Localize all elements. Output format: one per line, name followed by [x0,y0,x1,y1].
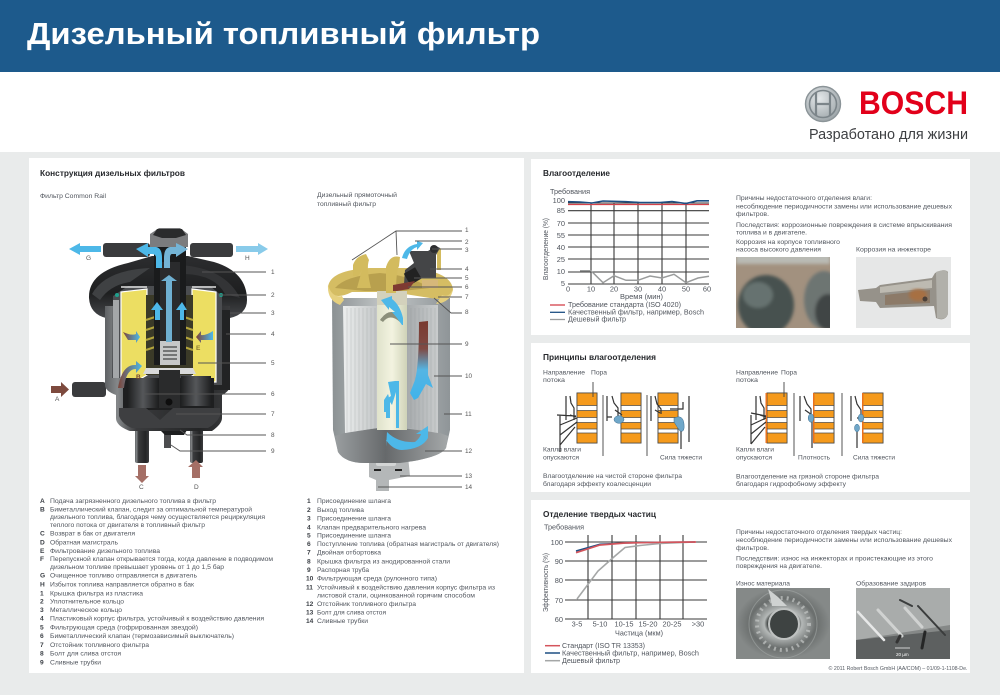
label: flow direction: Направление [543,370,585,376]
line chart: particle separation: >30 [692,620,704,628]
legend: inline filter: 13 [306,609,314,616]
legend: Common Rail filter: 9 [40,660,44,667]
label: flow direction [543,370,585,384]
icon: Bosch armature [806,86,840,122]
part numbers: 12 [465,448,473,455]
lower tubes [135,425,203,463]
legend: inline filter: Распорная труба [317,566,369,574]
labels: droplets and gravity: опускаются [543,454,579,462]
line chart: water separation: 5 [561,279,565,288]
text block: causes and consequences: топлива и в двигателе. [736,230,807,236]
legend: inline filter: 9 [307,567,311,574]
part numbers: 3 [271,310,275,317]
legend: Common Rail filter: дизельного топлива, благодаря чему осуществляется рециркуляция [50,513,265,521]
arrow: D [188,460,203,478]
caption [736,472,879,488]
pleats and core [146,295,193,375]
photo: scoring: 20 µm [896,652,909,657]
legend: inline filter: 5 [307,532,311,539]
line chart: particle separation: 80 [555,576,563,585]
part numbers: 2 [271,292,275,299]
line chart: particle separation: 70 [555,596,563,605]
part numbers: 13 [465,473,473,480]
caption: благодаря гидрофобному эффекту [736,480,847,488]
line chart: water separation: 60 [703,284,711,294]
labels: droplets and gravity: Капли влаги [543,446,581,454]
line chart: particle separation [541,522,707,665]
legend: Common Rail filter: Отстойник топливного фильтра [50,641,149,649]
legend: Common Rail filter: Сливные трубки [50,659,101,667]
filter media: left [121,289,147,382]
spacer tube [377,305,407,430]
photo caption: pump corrosion: насоса высокого давления [736,246,821,254]
arrow: E left [123,331,140,343]
line chart: water separation: Требования [550,187,590,196]
diagram: Common Rail filter [51,228,275,491]
legend: Common Rail filter [40,498,273,667]
legend: Common Rail filter: Болт для слива отстоя [50,651,121,658]
arrow: G [69,243,101,255]
legend: Common Rail filter: 1 [40,590,44,598]
legend: inline filter: 8 [307,558,311,565]
diagram: coalescence [543,370,702,488]
part numbers: 7 [465,294,469,301]
legend: Common Rail filter: D [40,540,45,546]
legend: inline filter: Выход топлива [317,507,364,514]
legend: inline filter: Сливные трубки [317,617,368,625]
legend: inline filter: 4 [307,524,311,531]
diagram: inline filter [328,227,473,491]
labels: droplets: Капли влаги [736,446,774,454]
letter labels [55,255,250,491]
leader lines [352,231,462,487]
labels: droplets and gravity [543,446,581,462]
legend: Common Rail filter: Фильтрование дизельного топлива [50,548,160,555]
label: flow direction [736,370,778,384]
legend: inline filter [306,498,499,625]
white logo band [0,72,1000,152]
label: pore: Пора [591,370,607,376]
line chart: water separation: Дешевый фильтр [568,314,626,324]
line chart: water separation: Время (мин) [620,292,663,301]
part numbers: 8 [271,432,275,439]
subheading second line: топливный фильтр [317,200,376,208]
legend: Common Rail filter: 6 [40,633,44,640]
line chart: particle separation: 90 [555,557,563,566]
text block: causes and consequences: несоблюдение периодичности замены или использование дешевых [736,536,953,544]
panel: water separation principles [531,343,970,492]
labels: droplets [736,446,774,462]
legend: inline filter: 14 [306,618,314,625]
text block: causes and consequences: фильтров. [736,545,769,552]
center column [160,262,180,342]
part numbers: 11 [465,411,472,418]
part numbers: 10 [465,373,473,380]
line chart: particle separation: 20-25 [663,620,681,628]
legend: Common Rail filter: Обратная магистраль [50,538,119,546]
line chart: particle separation: 100 [551,538,563,547]
legend: inline filter: Поступление топлива (обратная магистраль от двигателя) [317,540,499,548]
legend: inline filter: Болт для слива отстоя [317,609,386,616]
legend: inline filter: 10 [306,576,314,583]
legend: Common Rail filter: Подача загрязненного дизельного топлива в фильтр [50,498,216,505]
legend: Common Rail filter: G [40,573,45,580]
line chart: particle separation: Требования [544,522,584,532]
line chart: particle separation: Стандарт (ISO TR 13353) [562,641,645,650]
photo: pump corrosion [736,257,830,328]
legend: inline filter: Крышка фильтра из анодированной стали [317,557,450,565]
legend: Common Rail filter: Биметаллический клапан, следит за оптимальной температурой [50,506,252,514]
letter labels: E [196,345,201,352]
heading: Влагоотделение [543,168,610,178]
inlet marker [393,281,415,291]
legend: Common Rail filter: B [40,506,45,514]
cap [150,228,188,247]
legend: Common Rail filter: Пластиковый корпус фильтра, устойчивый к воздействию давления [50,615,264,623]
photo caption: wear: Износ материала [736,580,790,588]
text block: causes and consequences [736,529,953,570]
arrow: H [236,243,268,255]
legend: inline filter: 11 [306,584,313,591]
settling bowl [123,378,214,410]
part numbers: 14 [465,484,473,491]
line chart: water separation: 20 [610,284,618,294]
line chart: water separation: 0 [566,284,570,294]
legend: Common Rail filter: 3 [40,607,44,614]
wordmark: BOSCH [859,85,968,121]
caption: Влагоотделение на чистой стороне фильтра [543,472,682,480]
Bosch logo [806,85,968,143]
panel: water separation [531,159,970,335]
label: flow direction: Направление [736,370,778,376]
part numbers: 8 [465,309,469,316]
legend: Common Rail filter: Перепускной клапан открывается тогда, когда давление в подводимом [50,555,273,563]
heading: Конструкция дизельных фильтров [40,168,185,178]
part numbers: 7 [271,411,275,418]
line chart: water separation: Влагоотделение (%) [541,218,550,280]
line chart: particle separation: Качественный фильтр, например, Bosch [562,648,699,658]
line chart: water separation: 50 [682,284,690,294]
legend: Common Rail filter: E [40,548,45,555]
line chart: water separation: 10 [557,267,565,276]
photo caption: pump corrosion [736,239,840,254]
arrow: A [51,382,69,397]
line chart: particle separation: 5-10 [593,620,607,628]
line chart: water separation: 10 [587,284,595,294]
caption [543,472,682,488]
legend: inline filter: Присоединение шланга [317,498,391,505]
caption: благодаря эффекту коалесценции [543,480,651,488]
part numbers: 9 [271,448,275,455]
line chart: particle separation: Дешевый фильтр [562,656,620,665]
steel housing [332,298,450,463]
pleat stripes [347,308,435,432]
legend: inline filter: Двойная отбортовка [317,549,381,557]
legend: inline filter: Присоединение шланга [317,516,391,523]
legend: Common Rail filter: Металлическое кольцо [50,607,122,614]
bottom fittings [369,456,410,491]
letter labels: H [245,255,250,262]
labels: droplets: опускаются [736,454,772,462]
flow arrows: blue [136,243,188,342]
part numbers: 3 [465,247,469,254]
line chart: particle separation: 60 [555,615,563,624]
line chart: water separation: 40 [557,243,565,252]
line chart: water separation: Качественный фильтр, например, Bosch [568,308,704,316]
heading: Отделение твердых частиц [543,509,657,519]
part numbers: 5 [465,275,469,282]
text block: causes and consequences [736,195,953,236]
yellow hose connectors [353,254,371,288]
legend: inline filter: Отстойник топливного фильтра [317,600,416,608]
line chart: water separation: 85 [557,206,565,215]
line chart: water separation: 70 [557,219,565,228]
legend: Common Rail filter: Крышка фильтра из пластика [50,590,143,598]
line chart: particle separation: Эффективность (%) [541,553,550,612]
top yellow crimp [328,268,453,299]
line chart: particle separation: 15-20 [639,620,657,628]
side hoses [72,243,233,397]
arrow: E right [196,331,213,343]
title: Дизельный топливный фильтр [27,16,540,51]
diagram: hydrophobic [736,370,895,488]
letter labels: C [139,484,144,491]
legend: inline filter: 2 [307,507,311,514]
part numbers [271,269,275,455]
part numbers: 4 [271,331,275,338]
tagline: Разработано для жизни [809,126,968,143]
panel: solid particle separation [531,500,970,673]
legend: Common Rail filter: теплого потока от двигателя в топливный фильтр [50,521,205,529]
label: gravity: Сила тяжести [853,454,895,462]
line chart: water separation: 25 [557,255,565,264]
legend: Common Rail filter: F [40,556,44,563]
legend: inline filter: Присоединение шланга [317,532,391,539]
photo caption: pump corrosion: Коррозия на корпусе топливного [736,239,840,246]
legend: Common Rail filter: H [40,582,45,588]
text block: causes and consequences: повреждения на двигателе. [736,563,822,570]
legend: inline filter: Устойчивый к воздействию давления корпус фильтра из [317,583,495,591]
line chart: water separation: 100 [553,196,565,205]
settling bowl [335,428,448,463]
part numbers: 6 [465,284,469,291]
legend: inline filter: листовой стали, оцинкованной горячим способом [317,591,475,599]
legend: Common Rail filter: Фильтрующая среда (гофрированная звездой) [50,624,198,632]
legend: Common Rail filter: 8 [40,651,44,658]
text block: causes and consequences: фильтров. [736,211,769,218]
line chart: water separation: 40 [658,284,666,294]
copyright: © 2011 Robert Bosch GmbH (AA/COM) – 01/09-1-1108-De. [828,665,968,672]
letter labels: B [136,374,141,381]
leader lines [144,272,266,451]
legend: Common Rail filter: Уплотнительное кольцо [50,598,124,606]
legend: Common Rail filter: Избыток топлива направляется обратно в бак [50,580,194,588]
arrow: C [135,465,149,483]
text block: causes and consequences: Причины недостаточного отделения влаги: [736,195,872,202]
text block: causes and consequences: несоблюдение периодичности замены или использование дешевых [736,203,953,211]
part numbers: 4 [465,266,469,273]
part numbers: 9 [465,341,469,348]
preheating valve [404,246,440,284]
legend: Common Rail filter: Возврат в бак от двигателя [50,530,135,538]
cutaway shell [112,286,222,385]
arrow: flow through media [410,321,433,400]
label: pore: Пора [781,370,797,376]
text block: causes and consequences: Причины недостаточного отделения твердых частиц: [736,529,902,536]
legend: inline filter: Фильтрующая среда (рулонного типа) [317,576,437,583]
line chart: water separation: Требование стандарта (ISO 4020) [568,300,681,309]
photo caption: scoring: Образование задиров [856,580,927,588]
letter labels: A [55,396,60,403]
label: flow direction: потока [543,377,565,384]
arrow: B [118,361,142,388]
legend: Common Rail filter: Биметаллический клапан (термозависимый выключатель) [50,632,234,640]
legend: Common Rail filter: C [40,530,45,538]
label: gravity: Сила тяжести [660,454,702,462]
seal dots [115,293,223,297]
photo: material wear [736,588,830,659]
legend: Common Rail filter: Очищенное топливо отправляется в двигатель [50,573,198,580]
legend: Common Rail filter: 4 [40,616,44,623]
legend: Common Rail filter: дизельном топливе превышает уровень от 1 до 1,5 бар [50,563,224,571]
arrow: rising [384,381,399,428]
photo: scoring [856,588,950,659]
legend: inline filter: 7 [307,550,311,557]
text block: causes and consequences: Последствия: коррозионные повреждения в системе впрыскивания [736,222,952,229]
subheading: Common Rail: Фильтр Common Rail [40,193,107,200]
part numbers: 6 [271,391,275,398]
letter labels: D [194,484,199,491]
arrow: bottom swirl [386,426,428,450]
legend: inline filter: 6 [307,541,311,548]
part numbers: 1 [271,269,275,276]
arrow: up [381,296,403,325]
valve [160,341,180,365]
line chart: particle separation: Частица (мкм) [615,628,663,638]
legend: inline filter: 12 [306,601,314,608]
legend: Common Rail filter: 5 [40,624,44,632]
heading: Принципы влагоотделения [543,352,656,362]
legend: Common Rail filter: 2 [40,598,44,606]
pleated media left [343,306,377,433]
text block: causes and consequences: Последствия: износ на инжекторах и проистекающие из этого [736,556,933,562]
line chart: particle separation: 3-5 [572,620,582,628]
legend: Common Rail filter: A [40,498,45,505]
legend: inline filter: Клапан предварительного нагрева [317,524,426,531]
legend: inline filter: 3 [307,516,311,523]
photo caption: injector corrosion: Коррозия на инжекторе [856,246,931,254]
part numbers: 1 [465,227,469,234]
letter labels: G [86,255,91,262]
part numbers [465,227,473,491]
lid [89,256,247,318]
subheading: inline filter: Дизельный прямоточный [317,191,397,199]
photo: injector corrosion [856,257,951,328]
line chart: water separation: 30 [634,284,642,294]
header banner [0,0,1000,72]
part numbers: 2 [465,239,469,246]
line chart: water separation: 55 [557,231,565,240]
legend: Common Rail filter: 7 [40,642,44,649]
part numbers: 5 [271,360,275,367]
label: flow direction: потока [736,377,758,384]
legend: inline filter: 1 [307,498,311,505]
label: density: Плотность [798,454,831,462]
line chart: particle separation: 10-15 [615,620,633,628]
line chart: water separation [541,187,711,324]
arrow: outlet [402,241,423,259]
filter media: right [192,289,216,382]
caption: Влагоотделение на грязной стороне фильтра [736,472,879,480]
body [105,306,230,431]
pleated media right [407,305,438,433]
panel: construction of diesel filters [29,158,524,673]
